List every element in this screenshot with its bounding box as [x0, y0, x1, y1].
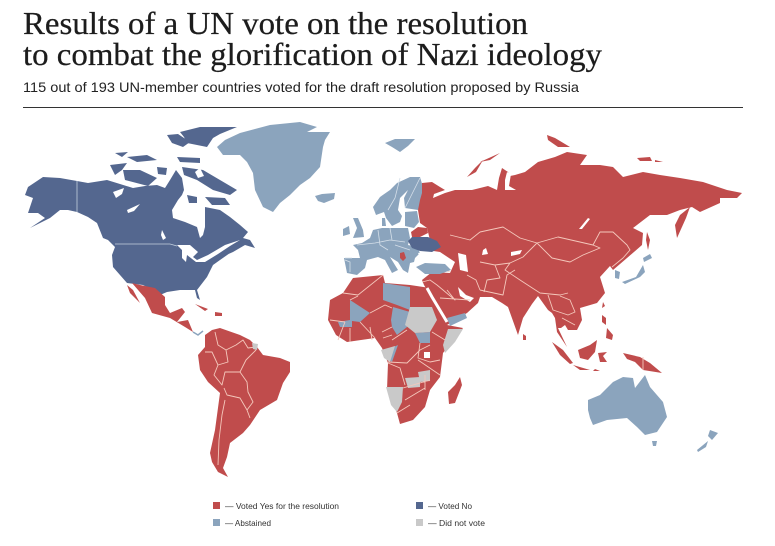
- Red Sea: [427, 288, 447, 322]
- Greenland: abstained: [217, 122, 330, 212]
- Africa abstained countries: [338, 283, 467, 362]
- Asian islands: voted yes: [467, 135, 690, 373]
- Japan, South Korea: abstained: [615, 254, 652, 284]
- Africa: voted yes: [328, 275, 463, 424]
- Madagascar: [448, 377, 462, 404]
- legend: voted no: — Voted No: [428, 501, 472, 511]
- Europe borders: [345, 178, 420, 272]
- title: to combat the glorification of Nazi ideology: [23, 36, 602, 72]
- North America: voted no: [25, 127, 255, 300]
- Svalbard: [385, 139, 415, 152]
- Ukraine: voted no: [408, 237, 441, 252]
- Serbia: voted yes: [400, 252, 406, 261]
- Asia borders: [422, 227, 630, 325]
- Europe: abstained: [343, 177, 423, 275]
- title: [23, 5, 602, 72]
- legend: [213, 501, 485, 528]
- subtitle: 115 out of 193 UN-member countries voted for the draft resolution proposed by Russia: [23, 79, 579, 95]
- South America: voted yes: [198, 328, 290, 477]
- title: Results of a UN vote on the resolution: [23, 5, 528, 41]
- header rule: [23, 107, 743, 108]
- Eurasia: voted yes: [418, 152, 742, 347]
- legend: abstained: — Abstained: [225, 518, 271, 528]
- Persian Gulf, Caspian and Black Sea: [418, 172, 590, 302]
- Mexico and Central America: voted yes: [127, 283, 222, 332]
- legend: did not vote: — Did not vote: [428, 518, 485, 528]
- Papua New Guinea border: [642, 357, 644, 370]
- Iceland: [315, 193, 335, 203]
- Panama: [193, 331, 203, 335]
- French Guiana: did not vote: [252, 343, 258, 350]
- Turkey: abstained: [416, 263, 451, 274]
- Australia and New Zealand: abstained: [588, 375, 718, 452]
- world map: [25, 122, 742, 477]
- Canada lakes and US border: [77, 168, 240, 262]
- South America borders: [205, 332, 256, 465]
- Africa did not vote countries: [381, 307, 463, 412]
- Lake Victoria: [424, 352, 430, 358]
- legend: voted yes: — Voted Yes for the resolution: [225, 501, 339, 511]
- Belarus: voted yes: [411, 227, 428, 237]
- Africa borders: [330, 275, 445, 413]
